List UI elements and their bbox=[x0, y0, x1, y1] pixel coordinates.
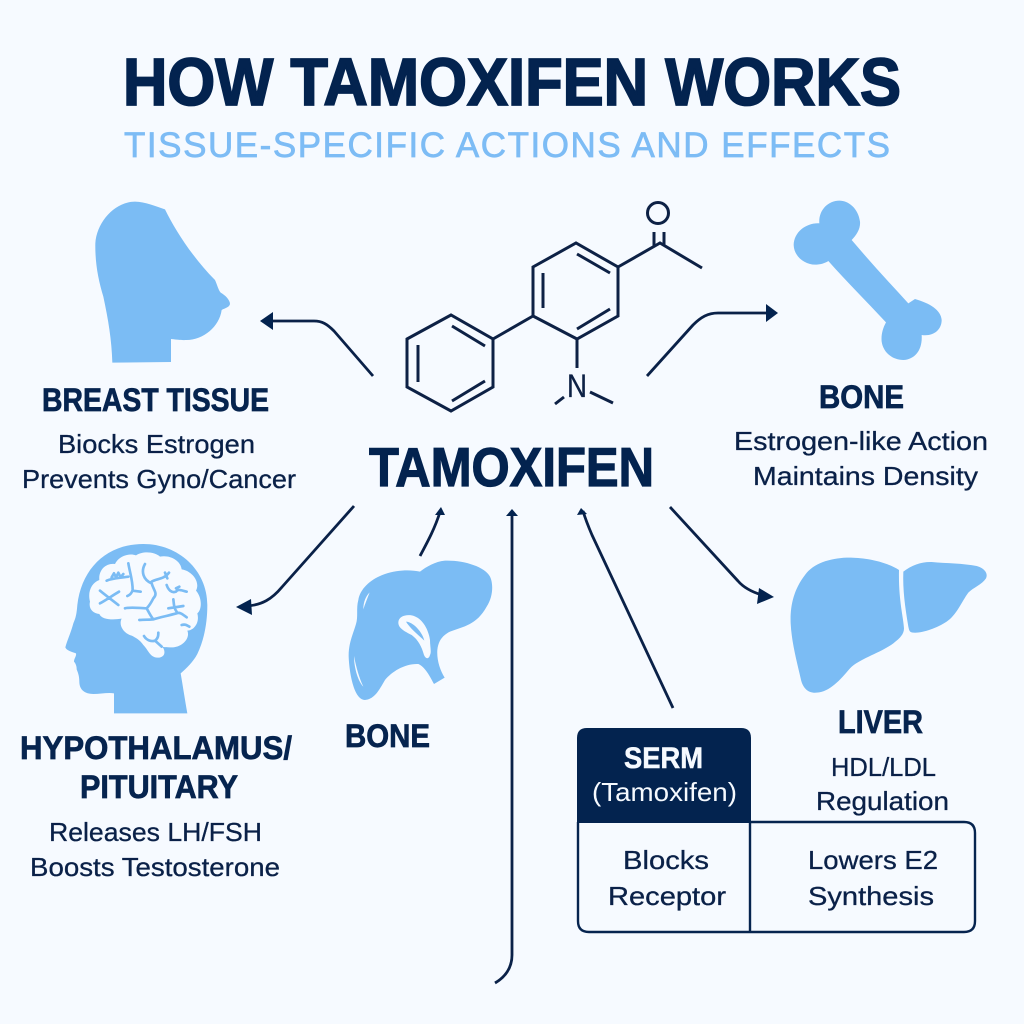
arrow: tamoxifen to hypothalamus bbox=[236, 506, 354, 615]
left lobe bbox=[791, 558, 904, 693]
heading: bone lower: BONE bbox=[345, 718, 430, 754]
icon: breast silhouette bbox=[95, 202, 230, 363]
comparison table: serm bbox=[577, 728, 975, 932]
cell: blocks: Blocks bbox=[623, 845, 709, 875]
heading: breast tissue: BREAST TISSUE bbox=[42, 382, 269, 418]
text block: hypothalamus/pituitary bbox=[20, 730, 292, 882]
text block: bone right bbox=[734, 379, 988, 491]
title: HOW TAMOXIFEN WORKS bbox=[123, 45, 901, 120]
head silhouette bbox=[65, 544, 207, 713]
heading: hypothalamus: HYPOTHALAMUS/ bbox=[20, 730, 292, 766]
central ring bbox=[493, 243, 618, 339]
central label: tamoxifen: TAMOXIFEN bbox=[369, 436, 654, 498]
dimethylamino group bbox=[555, 339, 613, 404]
arrow: serm table to tamoxifen bbox=[577, 508, 673, 708]
table header bbox=[577, 728, 751, 823]
heading: pituitary: PITUITARY bbox=[80, 769, 238, 805]
arrow: tamoxifen to liver bbox=[670, 507, 774, 604]
inner cavity bbox=[406, 622, 424, 641]
icon: second organ labelled bone bbox=[349, 561, 492, 700]
label: blocks estrogen: Biocks Estrogen bbox=[58, 429, 255, 459]
arrow: central vertical bbox=[495, 509, 518, 983]
brain bbox=[89, 552, 201, 658]
heading: bone: BONE bbox=[819, 379, 904, 415]
label: releases lh/fsh: Releases LH/FSH bbox=[49, 817, 262, 847]
phenyl ring bbox=[407, 315, 493, 411]
highlights bbox=[354, 592, 370, 687]
arrow: tamoxifen to breast tissue bbox=[260, 312, 373, 376]
icon: bone bbox=[794, 201, 942, 360]
label: prevents gyno/cancer: Prevents Gyno/Cancer bbox=[22, 464, 296, 494]
text block: liver bbox=[816, 704, 949, 816]
label: estrogen-like action: Estrogen-like Action bbox=[734, 426, 988, 456]
subtitle: TISSUE-SPECIFIC ACTIONS AND EFFECTS bbox=[124, 126, 890, 165]
white cavity bbox=[398, 615, 431, 658]
label: regulation: Regulation bbox=[816, 786, 949, 816]
arrow: tamoxifen to bone bbox=[647, 304, 778, 376]
arrow: bone to tamoxifen bbox=[420, 507, 445, 556]
label: maintains density: Maintains Density bbox=[753, 461, 978, 491]
header: tamoxifen: (Tamoxifen) bbox=[592, 777, 737, 807]
nitrogen label: N bbox=[567, 368, 587, 404]
heading: liver: LIVER bbox=[838, 704, 923, 740]
header: serm: SERM bbox=[624, 742, 703, 775]
right lobe bbox=[903, 562, 987, 633]
cell: receptor: Receptor bbox=[608, 881, 726, 911]
oxygen ring bbox=[648, 202, 668, 224]
acetyl group bbox=[618, 232, 702, 268]
cell: synthesis: Synthesis bbox=[808, 881, 934, 911]
icon: liver bbox=[791, 558, 987, 693]
cell: lowers e2: Lowers E2 bbox=[808, 845, 938, 875]
organ silhouette bbox=[349, 561, 492, 700]
label: boosts testosterone: Boosts Testosterone bbox=[30, 852, 280, 882]
icon: head with brain bbox=[65, 544, 207, 713]
brain folds bbox=[100, 563, 189, 647]
label: hdl/ldl: HDL/LDL bbox=[831, 752, 936, 782]
text block: breast tissue bbox=[22, 382, 296, 494]
table outline bbox=[578, 822, 975, 932]
chemical structure: tamoxifen bbox=[407, 202, 702, 411]
